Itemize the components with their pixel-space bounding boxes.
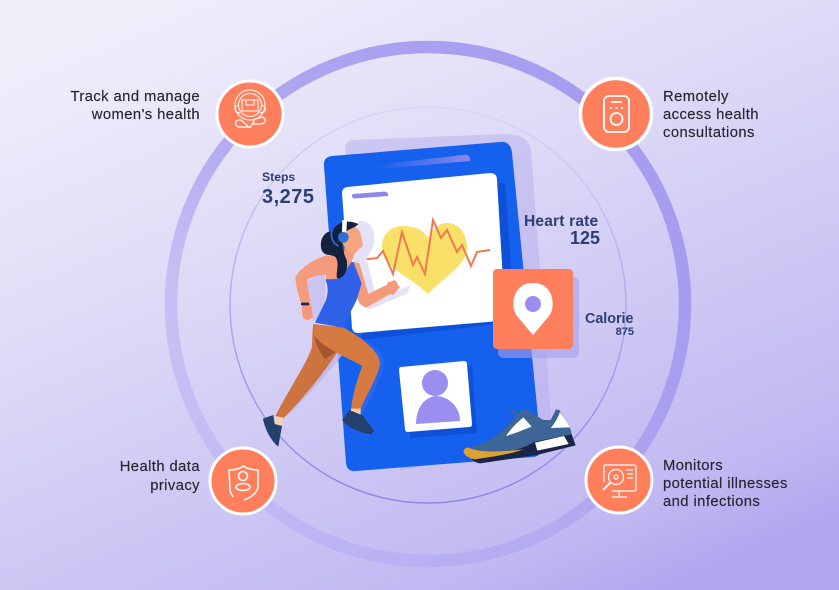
label: Health data [120, 459, 200, 475]
wristband [301, 303, 309, 305]
stat: calorie: Calorie [585, 311, 634, 327]
stat: calorie: 875 [616, 326, 634, 338]
feature: monitoring [586, 447, 788, 513]
face [341, 225, 363, 254]
phone speaker bar [375, 154, 470, 169]
phone shadow [345, 134, 553, 470]
heel panel [551, 412, 570, 428]
location pin [513, 283, 553, 335]
torso [315, 262, 362, 328]
runner [263, 220, 410, 447]
icon badge: shield [210, 448, 276, 514]
screen title bar [352, 192, 388, 198]
back ankle [274, 416, 283, 425]
label: Track and manage [70, 89, 200, 105]
laces [509, 409, 520, 416]
front ankle [351, 409, 361, 415]
sole stripe [535, 436, 569, 451]
headphone [338, 232, 349, 243]
neck [343, 243, 356, 268]
arm shadow [307, 272, 325, 321]
back leg [275, 324, 343, 418]
side panel [506, 417, 532, 436]
leg glow [290, 328, 384, 413]
feature: women's health: women's health [91, 107, 200, 123]
front shoe [342, 410, 374, 434]
heartbeat line [361, 220, 490, 274]
back leg shade [314, 336, 337, 359]
hair [321, 222, 358, 279]
icon badge: women's health [217, 81, 283, 147]
person card shadow [405, 366, 477, 438]
stat: heart rate: Heart rate [524, 213, 599, 230]
person card [399, 361, 472, 432]
feature: data privacy: privacy [150, 478, 200, 494]
label: Remotely [663, 89, 729, 105]
sole [472, 434, 576, 463]
feature: remote consultations [580, 78, 759, 150]
inner ring [230, 107, 626, 503]
phone body [324, 142, 541, 471]
feature: data privacy [120, 448, 276, 514]
phone illustration [324, 134, 553, 471]
feature: remote consultations: consultations [663, 125, 755, 141]
feature: monitoring: potential illnesses [663, 476, 788, 492]
fist [387, 280, 400, 295]
feature: remote consultations: access health [663, 107, 759, 123]
outer ring [171, 47, 685, 561]
label: Monitors [663, 458, 723, 474]
sneaker [463, 408, 576, 463]
back leg shadow band [283, 351, 343, 418]
stat: heart rate: 125 [570, 228, 600, 248]
feature: monitoring: and infections [663, 494, 760, 510]
hand [302, 306, 313, 321]
head shadow [350, 221, 375, 307]
upper [463, 408, 573, 461]
front leg [313, 324, 380, 409]
heart [382, 223, 467, 294]
chest skin [326, 254, 357, 281]
yellow sole [463, 447, 523, 459]
person avatar [416, 370, 460, 424]
location card [493, 269, 579, 358]
icon badge: monitor [586, 447, 652, 513]
screen shadow [352, 183, 515, 340]
headband [342, 220, 347, 233]
stat: steps: 3,275 [262, 186, 315, 208]
fist shadow [365, 285, 410, 309]
stat: heart rate [524, 213, 600, 248]
icon badge: remote device [580, 78, 652, 150]
stat: steps: Steps [262, 170, 295, 184]
back arm [295, 255, 328, 307]
screen [342, 173, 505, 333]
front arm [353, 262, 392, 307]
back shoe [263, 415, 282, 447]
stat: steps [262, 170, 315, 208]
stat: calorie [585, 311, 634, 338]
feature: women's health [70, 81, 283, 147]
